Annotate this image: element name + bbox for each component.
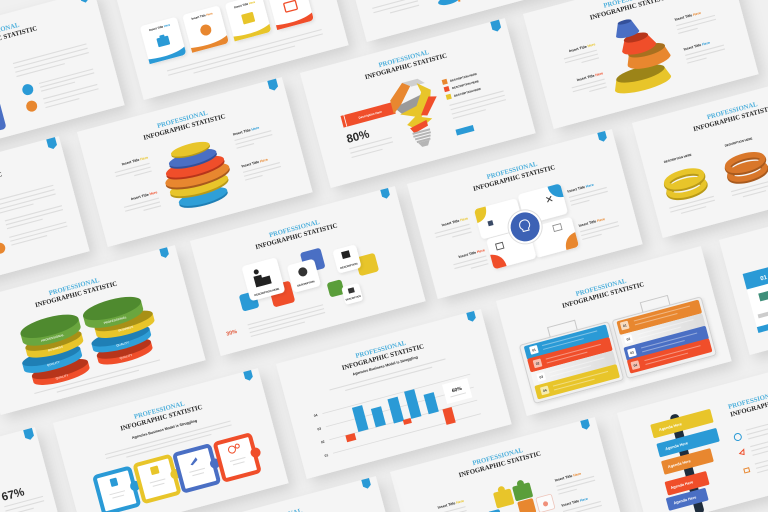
paragraph: [167, 30, 324, 80]
title: INFOGRAPHIC STATISTIC: [34, 280, 118, 309]
red description bar: [341, 102, 396, 128]
text: top right: [233, 123, 273, 148]
badge: [23, 428, 35, 441]
slide: top centre (partial): [336, 0, 572, 42]
ring labels: DESCRIPTION HERE: [724, 136, 753, 148]
panel: [0, 136, 90, 306]
subtitle: Agencies Business Model is Struggling: [352, 355, 418, 376]
ring labels: DESCRIPTION HERE: [663, 153, 692, 164]
title: PROFESSIONAL: [472, 447, 524, 467]
badge: [159, 247, 170, 259]
badge: [243, 370, 254, 382]
left stack: QUALITY: [46, 360, 60, 367]
white card: person: [241, 257, 285, 301]
text: bottom right: [683, 37, 726, 63]
box: blue: [94, 466, 145, 512]
panel: [53, 368, 289, 512]
text: top right: Insert Title Here: [554, 472, 582, 483]
badge: [580, 419, 591, 431]
puzzle pieces: [482, 473, 555, 512]
text: bottom right: Insert Title Here: [683, 41, 710, 52]
panel: [276, 309, 512, 479]
panel: [0, 0, 125, 160]
card: blue: Insert Title Here: [149, 23, 171, 32]
text: left: [429, 499, 467, 512]
panel: [523, 0, 759, 129]
paragraphs: [746, 411, 768, 473]
partial object: [437, 0, 460, 7]
paragraph: [372, 0, 419, 17]
text: bottom right: Insert Title Here: [561, 497, 588, 508]
signpost: Agenda Here: [659, 422, 682, 432]
white card: globe: [287, 259, 321, 293]
text: bottom right: [561, 494, 602, 512]
title: PROFESSIONAL: [355, 340, 407, 360]
right case: 03: [630, 350, 635, 355]
slide: stacked discs: [77, 77, 313, 247]
box: yellow: [135, 454, 185, 502]
slide: text left (partial): [0, 136, 90, 306]
slide: rings: [632, 68, 768, 238]
card: blue: [140, 17, 186, 64]
white card: car: DESCRIPTION: [346, 296, 362, 302]
slide: signpost: [617, 358, 768, 512]
slide: layered stacks: [0, 245, 206, 415]
badge: [466, 311, 477, 323]
legend: DESCRIPTION HERE: [454, 87, 482, 98]
text: top left: Insert Title Here: [569, 42, 596, 53]
left stack: QUALITY: [55, 373, 69, 380]
title: PROFESSIONAL: [48, 277, 101, 297]
panel: [113, 0, 349, 100]
card: orange: Insert Title Here: [191, 11, 213, 21]
badge: [267, 79, 279, 92]
text: top left: [433, 216, 472, 241]
right case: 01: [622, 323, 627, 328]
bar chart: [313, 372, 481, 458]
title: PROFESSIONAL: [486, 161, 539, 181]
slide: text with circles (top left): [0, 0, 125, 160]
right stack: [81, 290, 163, 369]
white card: person: DESCRIPTION HERE: [254, 287, 280, 297]
white card: car: [341, 283, 363, 305]
card: yellow: Insert Title Here: [234, 0, 256, 9]
title: PROFESSIONAL: [156, 110, 209, 130]
right case: [609, 287, 716, 379]
bar chart: 01: [324, 453, 329, 458]
paragraph: [248, 305, 326, 337]
text: bottom left: [122, 190, 161, 215]
text: bottom left: Insert Title Here: [131, 190, 158, 201]
left case: 01: [532, 348, 536, 353]
right stack: PROFESSIONAL: [103, 315, 127, 325]
panel: [336, 0, 572, 42]
right case: 04: [633, 363, 638, 368]
legend: [442, 71, 482, 100]
right stack: QUALITY: [119, 353, 133, 360]
text: top right: [554, 469, 596, 494]
text: bottom right: [241, 155, 282, 180]
paragraph: [34, 360, 161, 398]
box: red: [215, 433, 265, 481]
title: INFOGRAPHIC STATISTIC: [143, 113, 226, 142]
title: INFOGRAPHIC STATISTIC: [561, 281, 645, 310]
badge: [597, 131, 608, 143]
signpost: Agenda Here: [670, 480, 694, 490]
slide: far right (partial): [719, 185, 768, 355]
title: PROFESSIONAL: [706, 101, 759, 121]
text: bottom left: Insert Title Here: [576, 71, 604, 82]
signpost: Agenda Here: [668, 459, 691, 469]
bar chart: 02: [320, 440, 325, 444]
text: bottom right: [578, 214, 620, 240]
title: INFOGRAPHIC STATISTIC: [472, 164, 556, 193]
title: PROFESSIONAL: [133, 400, 186, 421]
white card: people: DESCRIPTION: [340, 261, 358, 270]
text: top left: [113, 156, 152, 180]
signpost: [645, 405, 737, 512]
30 percent: 30%: [226, 329, 238, 338]
stacked discs: [157, 135, 237, 214]
panel: [407, 129, 643, 299]
text: left: Insert Title Here: [437, 499, 465, 510]
card: yellow: [225, 0, 271, 41]
text: top right: [674, 8, 717, 33]
badge: [380, 188, 391, 200]
text: bottom left: Insert Title Here: [458, 248, 485, 259]
signpost: Agenda Here: [665, 441, 688, 451]
slide: puzzle chain: [53, 368, 289, 512]
text: top right: Insert Title Here: [233, 126, 260, 137]
callout: 60 percent: 60%: [451, 386, 463, 394]
left case: 02: [535, 361, 540, 366]
text: bottom right: Insert Title Here: [578, 217, 605, 228]
left case: 03: [539, 375, 544, 380]
80 percent: 80%: [345, 128, 371, 146]
callout: 60 percent: [442, 378, 472, 404]
central bulb hub: [504, 206, 546, 248]
card: 01: [760, 275, 768, 282]
panel: [390, 417, 626, 512]
paragraphs: [669, 180, 768, 216]
title: PROFESSIONAL: [268, 219, 321, 239]
paragraph: [330, 359, 447, 394]
button: [455, 125, 474, 135]
slide: cones: [523, 0, 759, 129]
four cards: [473, 183, 579, 270]
legend: DESCRIPTION HERE: [452, 79, 479, 90]
text: bottom left: [451, 248, 488, 272]
text: top left: Insert Title Here: [441, 216, 468, 227]
legend: DESCRIPTION HERE: [450, 72, 478, 83]
slide: bar chart: [276, 309, 512, 479]
title: INFOGRAPHIC STATISTIC: [458, 450, 542, 479]
title: INFOGRAPHIC STATISTIC: [364, 52, 448, 81]
right stack: BUSINESS: [118, 325, 134, 333]
paragraph: [449, 91, 507, 118]
badge: [490, 20, 502, 33]
ring labels: [663, 136, 753, 164]
left case: [517, 312, 624, 403]
paragraph: [13, 44, 100, 113]
card: red: [267, 0, 314, 30]
panel: [496, 246, 732, 416]
slide: briefcases: [496, 246, 732, 416]
panel: [171, 476, 407, 512]
panel: [0, 245, 206, 415]
title: PROFESSIONAL: [378, 49, 430, 69]
left stack: BUSINESS: [48, 345, 63, 352]
badge: [46, 137, 58, 150]
right case: 02: [626, 337, 631, 342]
left stack: PROFESSIONAL: [41, 333, 65, 343]
slide: four icon cards: [113, 0, 349, 100]
red description bar: Description Here: [358, 110, 383, 120]
white card: people: [332, 244, 362, 274]
paragraph: [105, 421, 233, 462]
left case: 04: [543, 388, 547, 393]
title: INFOGRAPHIC STATISTIC: [341, 343, 425, 372]
bar chart: 04: [313, 413, 318, 418]
panel: [617, 358, 768, 512]
panel: [190, 186, 426, 356]
slide: bottom (partial): [171, 476, 407, 512]
slide: lightbulb: [300, 18, 536, 188]
card: orange: [182, 5, 229, 53]
paragraph left: [349, 137, 394, 158]
circle markers: [21, 83, 39, 113]
slide: icon squares: [190, 186, 426, 356]
badge: [361, 478, 372, 490]
panel: [300, 18, 536, 188]
panel: [719, 185, 768, 355]
text: top left: Insert Title Here: [121, 156, 149, 166]
left stack: [12, 310, 93, 391]
title: PROFESSIONAL: [575, 278, 628, 298]
white card: globe: DESCRIPTION: [297, 279, 315, 288]
paragraph: [0, 184, 68, 247]
orange rings: [726, 152, 767, 184]
slide: 67 percent (partial): [0, 427, 66, 512]
panel: [77, 77, 313, 247]
bulb illustration: [387, 75, 448, 152]
right stack: QUALITY: [116, 340, 129, 348]
title: INFOGRAPHIC STATISTIC: [120, 404, 203, 433]
67 percent: 67%: [0, 486, 26, 504]
paragraph: [4, 496, 45, 512]
slide: puzzle pieces: [390, 417, 626, 512]
box: dark blue: [174, 444, 225, 491]
subtitle: Agencies Business Model is Struggling: [131, 419, 197, 440]
yellow rings: [665, 168, 706, 200]
text: bottom left: [570, 71, 607, 96]
marker: [0, 241, 7, 255]
icons: [734, 433, 751, 473]
title: INFOGRAPHIC STATISTIC: [255, 222, 338, 251]
badge: [79, 0, 90, 4]
text: bottom right: Insert Title Here: [241, 158, 268, 169]
blue block: [0, 94, 7, 136]
text: top right: Insert Title Here: [567, 183, 594, 194]
text: top left: [562, 42, 599, 67]
card: [743, 259, 768, 333]
slide: hub and cards: [407, 129, 643, 299]
panel: [632, 68, 768, 238]
stacked cones: [598, 11, 678, 98]
text: top right: [567, 180, 609, 205]
colored tiles: [232, 234, 383, 320]
bar chart: 03: [317, 427, 322, 431]
signpost: Agenda Here: [673, 495, 697, 505]
panel: [0, 427, 66, 512]
text: top right: Insert Title Here: [674, 11, 701, 22]
